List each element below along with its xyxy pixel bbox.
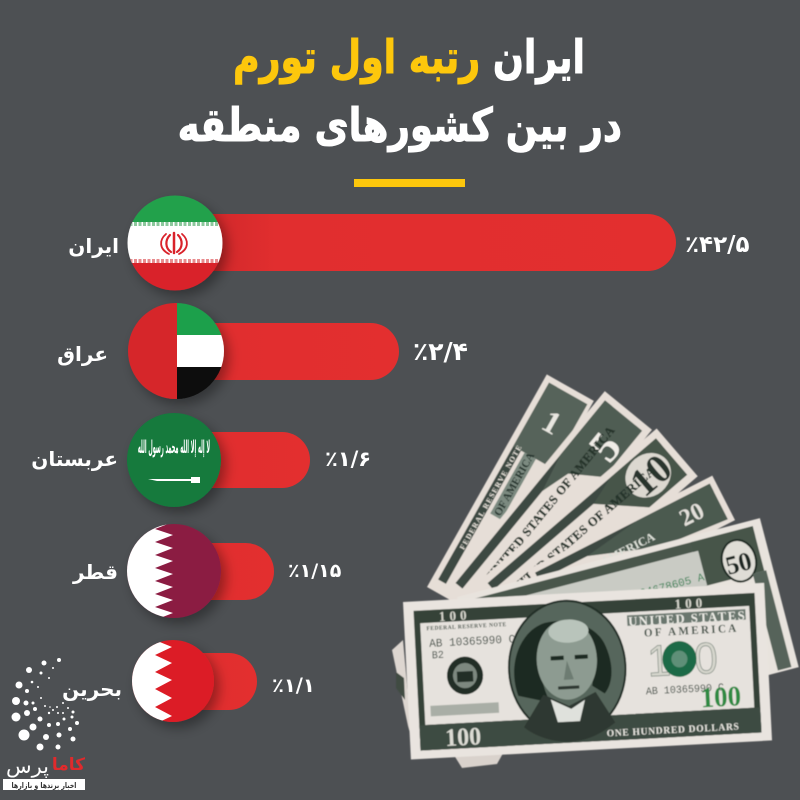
logo tagline xyxy=(3,779,85,790)
value: ٪۴۲/۵ xyxy=(685,232,750,258)
label: ایران xyxy=(68,234,119,258)
bill: 50: 50 xyxy=(722,546,755,581)
bill: 50 xyxy=(457,518,799,746)
bill: 1: 1 xyxy=(536,403,568,442)
logo wordmark: کاما xyxy=(52,755,85,775)
heading text xyxy=(627,609,746,626)
bill: 10: UNITED STATES OF AMERICA xyxy=(503,464,658,601)
yellow divider xyxy=(354,179,465,187)
bill: 1: FEDERAL RESERVE NOTE xyxy=(458,443,524,551)
bill: 5 xyxy=(442,391,652,629)
bill: 100 front: AB 10365990 C xyxy=(646,682,724,699)
flag xyxy=(130,638,216,724)
bill: 5: UNITED STATES OF AMERICA xyxy=(484,423,618,582)
row: Bahrain xyxy=(62,638,315,724)
title xyxy=(178,31,622,153)
big 100 with seal: 100 xyxy=(646,634,719,687)
bill: 50: 34678605 A xyxy=(639,572,706,601)
bill: 20: AMERICA xyxy=(598,529,657,569)
row: Iran xyxy=(68,194,750,293)
label: بحرین xyxy=(62,677,122,701)
row: Iraq xyxy=(57,300,468,404)
bill: 100 front: OF AMERICA xyxy=(644,623,737,640)
bar xyxy=(176,323,399,380)
bill: 10: 10 xyxy=(621,445,681,505)
label: قطر xyxy=(72,560,118,584)
bill: 100 front: 100 xyxy=(444,723,482,752)
bill: 1 xyxy=(427,374,594,614)
logo: اخبار برندها و بازارها xyxy=(12,780,76,790)
flag: لا إله إلا الله محمد رسول الله xyxy=(138,438,210,458)
peeking bills xyxy=(392,640,412,740)
logo: پرس xyxy=(6,754,49,778)
bill: 20: 20 xyxy=(675,498,709,532)
title line two: در بین کشورهای منطقه xyxy=(178,98,622,153)
title line one: ایران رتبه اول تورم xyxy=(233,31,585,85)
bar xyxy=(174,543,274,600)
row: Saudi Arabia xyxy=(31,413,371,507)
value: ٪۱/۱۵ xyxy=(288,560,342,582)
label: عربستان xyxy=(31,447,118,471)
value: ٪۱/۶ xyxy=(325,447,371,471)
money photo xyxy=(392,374,799,768)
logo dots xyxy=(12,658,79,750)
label: عراق xyxy=(57,342,108,366)
bill: 100 front: UNITED STATES xyxy=(628,608,745,629)
green 100: 100 xyxy=(700,681,742,714)
flag: Iran xyxy=(125,194,225,293)
bill: 100 front: 100 xyxy=(674,595,707,612)
portrait xyxy=(506,598,629,738)
bill: 20 xyxy=(527,476,735,615)
row: Qatar xyxy=(72,522,342,620)
serial numbers: AB 10365990 C xyxy=(429,634,516,651)
bill: 100 front: FEDERAL RESERVE NOTE xyxy=(426,622,507,632)
bar xyxy=(175,214,676,271)
value: ٪۲/۴ xyxy=(413,337,468,366)
flag xyxy=(125,522,225,620)
flag xyxy=(125,300,227,404)
bill: 100 front: B2 xyxy=(432,650,444,662)
frame text: 100 xyxy=(439,607,471,624)
value: ٪۱/۱ xyxy=(272,674,315,697)
bill: 1: OF AMERICA xyxy=(492,451,537,518)
bar xyxy=(173,653,257,710)
flag xyxy=(127,413,221,507)
bottom text: ONE HUNDRED DOLLARS xyxy=(606,721,740,740)
bar xyxy=(174,432,310,488)
logo xyxy=(3,658,85,790)
bill: 5: 5 xyxy=(579,423,631,471)
federal seal xyxy=(446,656,484,695)
bill: 10 xyxy=(477,428,698,631)
bill: 100 front xyxy=(403,583,772,760)
